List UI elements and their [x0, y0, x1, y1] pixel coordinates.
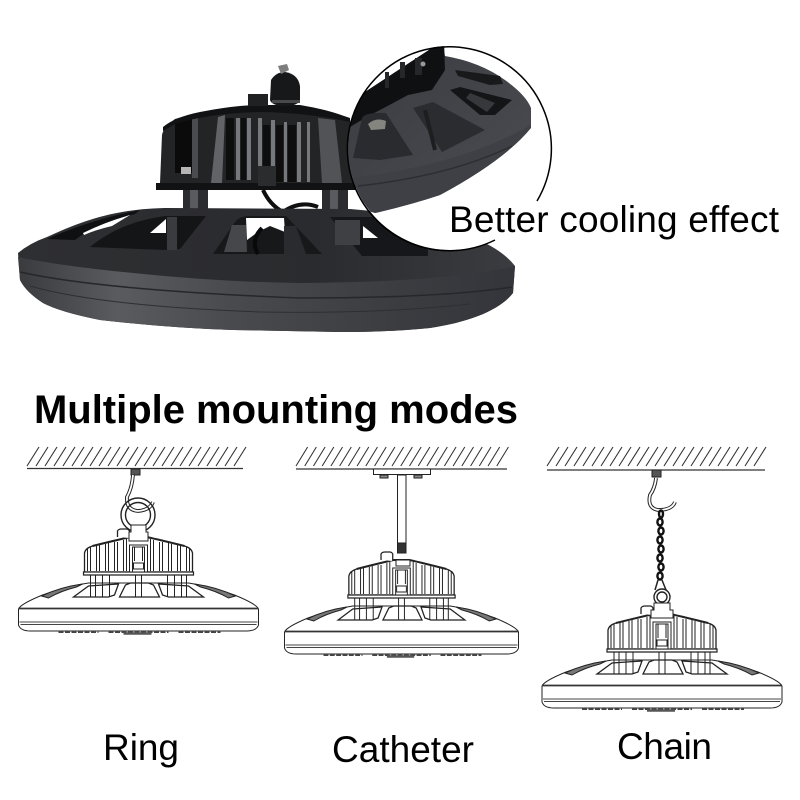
- lamp driver body: [156, 105, 356, 190]
- housing vent windows: [47, 210, 428, 256]
- lens outline: [347, 47, 551, 251]
- zoomed detail lens: [345, 40, 552, 251]
- catheter mount plate and rod: [374, 469, 430, 553]
- power cable: [263, 190, 318, 212]
- ceiling hatch: chain: [547, 447, 766, 470]
- support posts: [183, 190, 348, 212]
- chain mount block: [651, 603, 673, 618]
- ring mount lamp drawing: [18, 529, 258, 634]
- chain mount lamp drawing: [542, 606, 782, 710]
- ring mount hook: [121, 469, 155, 532]
- label: chain: Chain: [617, 726, 712, 767]
- catheter mount lamp drawing: [284, 552, 518, 656]
- heading: multiple mounting modes: Multiple mounting modes: [34, 388, 518, 432]
- caption: better cooling effect: Better cooling effect: [449, 199, 780, 240]
- cable gland: [248, 64, 300, 106]
- label: ring: Ring: [103, 727, 179, 768]
- ring mount block: [129, 525, 148, 541]
- ceiling hatch: catheter: [296, 447, 508, 469]
- lamp housing: [18, 208, 515, 332]
- chain mount hook and chain: [649, 470, 675, 605]
- catheter mount block: [396, 560, 410, 566]
- photo: UFO high bay lamp: [18, 40, 552, 332]
- label: catheter: Catheter: [332, 729, 474, 770]
- ceiling hatch: ring: [27, 447, 246, 468]
